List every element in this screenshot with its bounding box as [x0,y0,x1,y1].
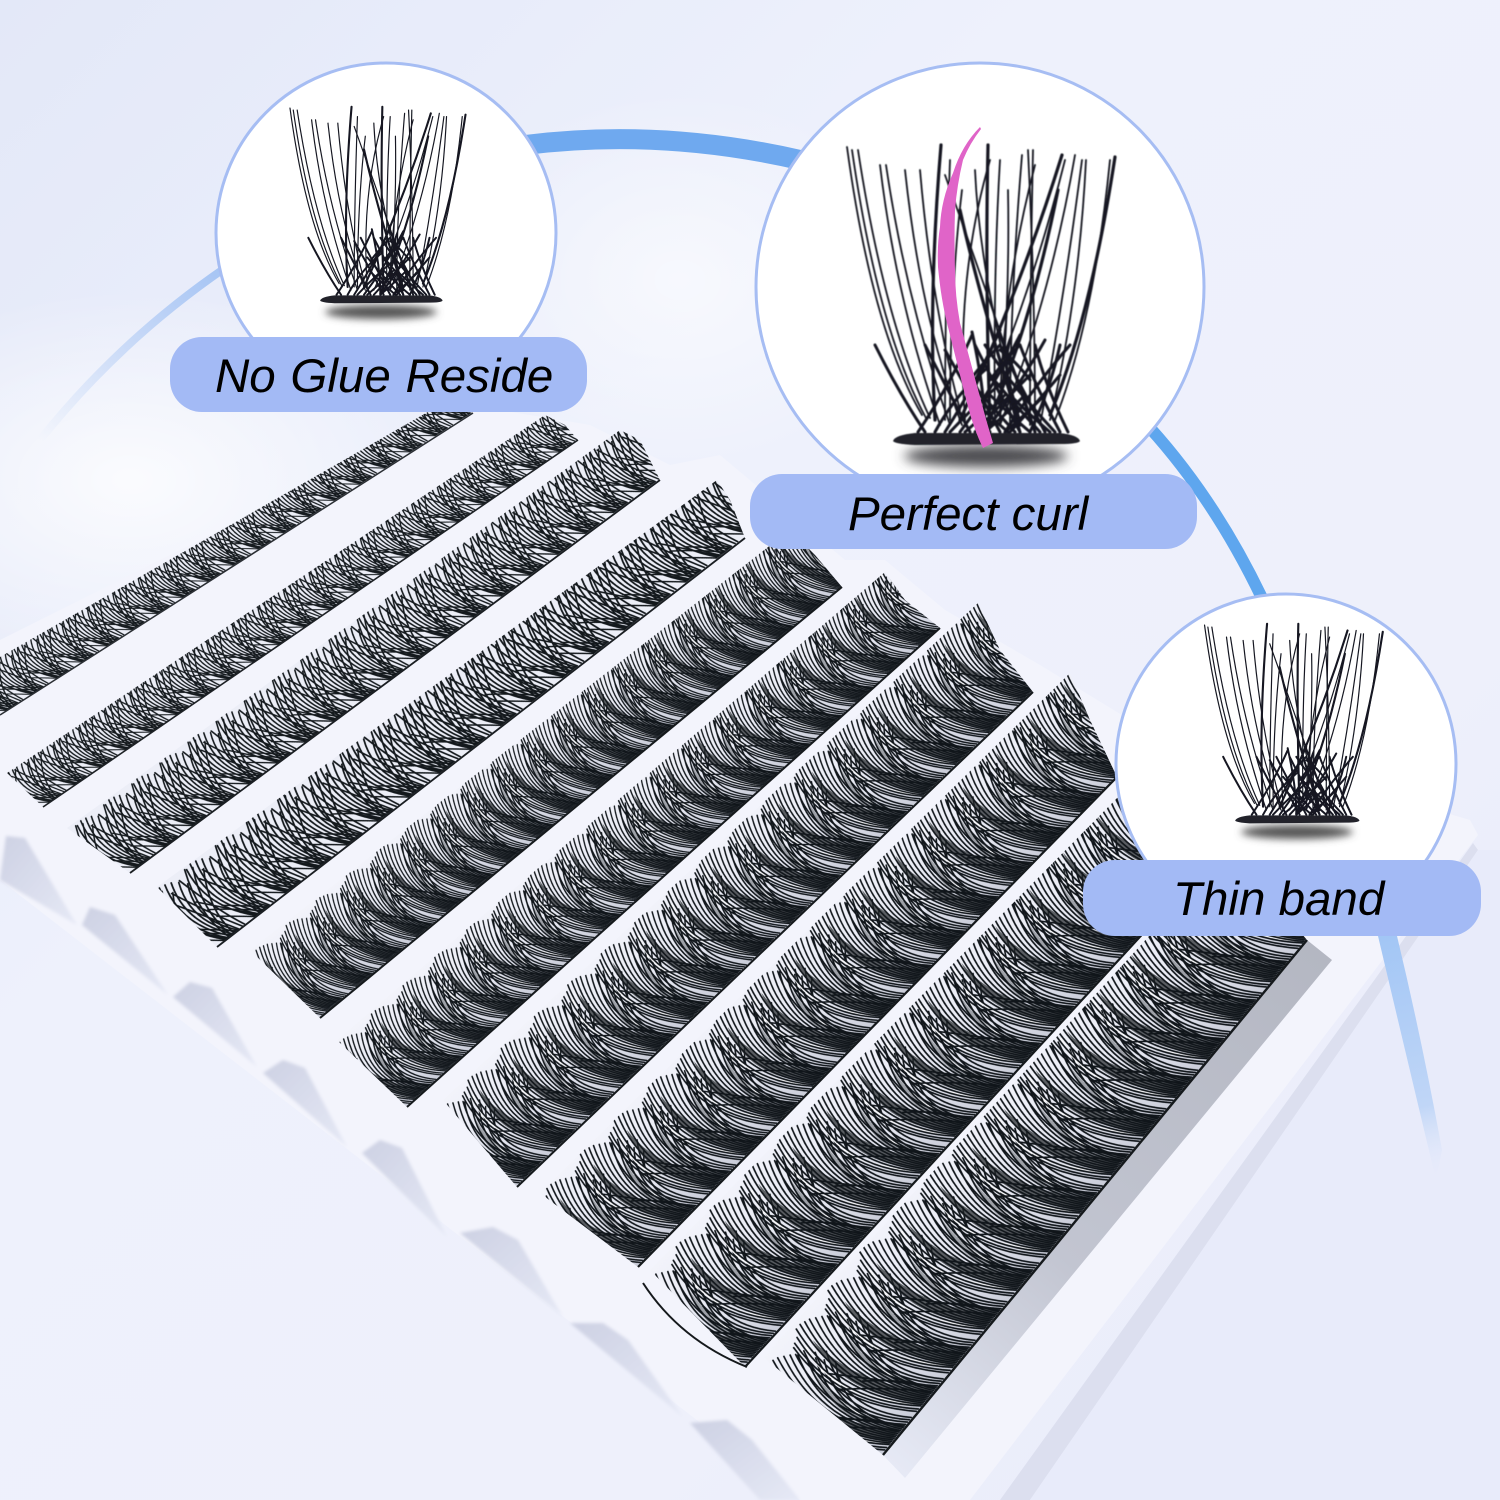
row 2 [7,415,578,807]
row 7 [443,603,1033,1187]
row 4 [157,480,745,947]
blue arc behind the callouts [40,139,1262,598]
magnified circle [756,63,1204,511]
shadow under band [325,305,437,319]
row 6 [337,572,940,1107]
icon: lash cluster [847,145,1115,445]
magnified circle [1116,594,1456,934]
label text: Thin band [1173,873,1386,926]
label text: Perfect curl [848,488,1090,541]
label pill [750,474,1197,549]
shadow under band [1241,825,1353,839]
row 8 [540,673,1117,1267]
row 3 [67,430,660,873]
lash tray [0,405,1500,1500]
row 1 [0,405,473,715]
label pill [170,337,587,412]
shadow under band [904,445,1068,467]
lash rows [0,405,1307,1455]
pink curl highlight [938,127,993,448]
icon: lash cluster [1205,624,1383,823]
blue arc fading over the tray [1378,936,1442,1180]
label text: No Glue Reside [215,350,553,403]
callout: thin band [1083,594,1481,936]
magnified circle [216,63,556,403]
label pill [1083,860,1481,936]
icon: lash cluster [290,107,466,303]
callout: no glue residue [170,63,587,412]
row 5 [250,530,842,1018]
row 9 [643,790,1215,1367]
callout: perfect curl [750,63,1204,549]
row 10 [763,850,1307,1455]
